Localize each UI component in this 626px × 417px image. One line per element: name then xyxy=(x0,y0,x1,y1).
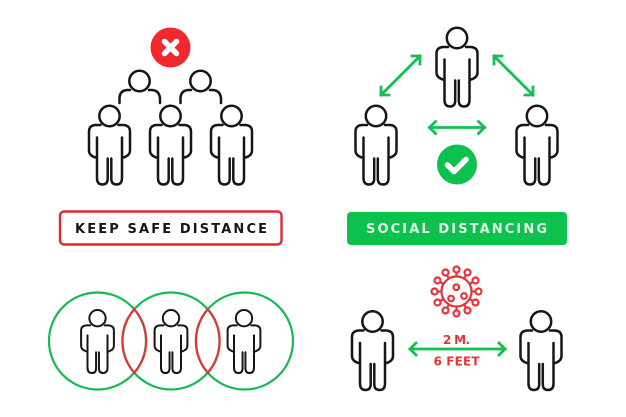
person left xyxy=(352,311,393,390)
icon: green check badge xyxy=(437,144,477,184)
panel: two metre distance xyxy=(352,266,562,390)
arrow: horizontal xyxy=(430,122,484,134)
person front center xyxy=(150,106,191,184)
person front left xyxy=(89,106,130,184)
text: 6 FEET: 6 FEET xyxy=(434,354,480,368)
label: keep safe distance xyxy=(60,212,282,244)
panel: overlapping circles xyxy=(49,292,293,390)
arrow: diagonal left xyxy=(381,56,420,95)
arrow: diagonal right xyxy=(494,56,533,95)
label: social distancing xyxy=(347,212,567,245)
person left xyxy=(356,106,396,184)
back row person right xyxy=(180,71,221,103)
arrow: distance xyxy=(410,343,505,355)
person front right xyxy=(211,106,252,184)
red overlap zones xyxy=(122,309,220,373)
green circles xyxy=(49,292,293,390)
person in right circle xyxy=(228,310,260,373)
person right xyxy=(520,311,562,390)
person top xyxy=(436,28,478,106)
person right xyxy=(516,106,558,184)
panel: social distancing triangle xyxy=(356,28,558,184)
person in left circle xyxy=(81,310,114,373)
text: 2 M.: 2 M. xyxy=(443,333,470,347)
back row person left xyxy=(120,71,160,103)
label: social distancing: SOCIAL DISTANCING xyxy=(366,222,547,237)
icon: virus xyxy=(432,266,482,316)
label: keep safe distance: KEEP SAFE DISTANCE xyxy=(75,222,267,237)
icon: red cross badge xyxy=(150,28,190,68)
panel: keep safe distance crowd xyxy=(89,28,252,184)
person in middle circle xyxy=(155,310,187,373)
